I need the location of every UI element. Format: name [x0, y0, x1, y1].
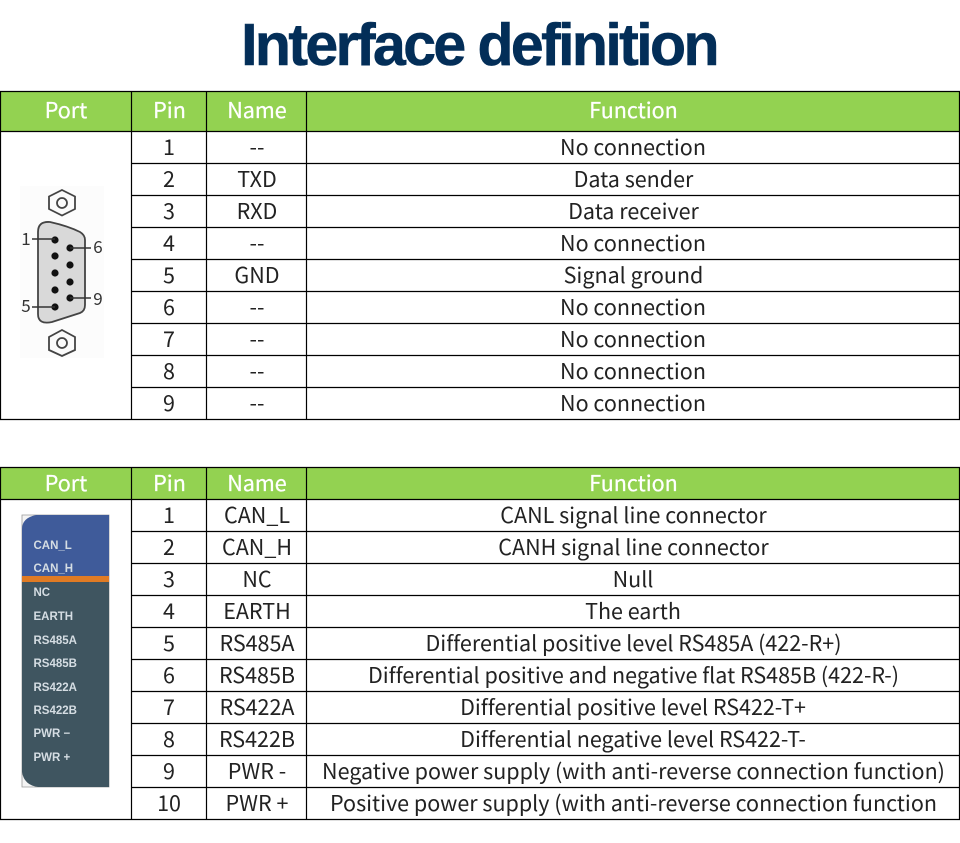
- row: pin 5: 5: [163, 627, 175, 658]
- row: pin 5: GND: [234, 259, 280, 290]
- row: pin 4: --: [250, 227, 264, 258]
- table: terminal port pin definition: [0, 467, 960, 820]
- row: pin 2: CANH signal line connector: [498, 531, 769, 562]
- row: pin 5: Signal ground: [564, 259, 703, 290]
- table: DB9 port pin definition: [0, 92, 960, 420]
- header row: Name: [227, 467, 287, 498]
- row: pin 2: [163, 163, 694, 194]
- row: pin 8: No connection: [560, 355, 706, 386]
- row: pin 3: NC: [242, 563, 272, 594]
- row: pin 5: [163, 627, 842, 658]
- row: pin 3: RXD: [237, 195, 277, 226]
- row: pin 7: RS422A: [219, 691, 295, 722]
- row: pin 6: No connection: [560, 291, 706, 322]
- row: pin 5: RS485A: [219, 627, 295, 658]
- row: pin 8: Differential negative level RS422-T-: [460, 723, 806, 754]
- row: pin 5: 5: [163, 259, 175, 290]
- header row: Function: [589, 94, 678, 125]
- header row: Name: [227, 94, 287, 125]
- header row: [0, 92, 960, 132]
- icon: terminal block label strip: RS422A: [34, 682, 77, 694]
- row: pin 9: No connection: [560, 387, 706, 418]
- icon: DB9 connector diagram: [20, 186, 104, 358]
- row: pin 6: --: [250, 291, 264, 322]
- row: pin 7: No connection: [560, 323, 706, 354]
- row: pin 5: Differential positive level RS485A (422-R+): [425, 627, 842, 658]
- icon: DB9 connector diagram: 9: [93, 285, 103, 310]
- icon: terminal block label strip: RS485B: [34, 658, 77, 670]
- icon: terminal block label strip: NC: [34, 587, 50, 599]
- row: pin 10: Positive power supply (with anti-reverse connection function: [330, 787, 937, 818]
- row: pin 2: Data sender: [574, 163, 694, 194]
- row: pin 9: 9: [163, 387, 175, 418]
- row: pin 3: [163, 195, 700, 226]
- row: pin 1: 1: [163, 131, 175, 162]
- row: pin 4: [163, 227, 706, 258]
- icon: terminal block label strip: RS485A: [34, 635, 77, 647]
- row: pin 4: [163, 595, 681, 626]
- row: pin 2: 2: [163, 531, 175, 562]
- row: pin 2: CAN_H: [222, 531, 292, 562]
- header row: Port: [45, 94, 87, 125]
- row: pin 1: [163, 499, 767, 530]
- row: pin 8: [163, 723, 806, 754]
- icon: DB9 connector diagram: 1: [21, 225, 31, 250]
- row: pin 9: 9: [163, 755, 175, 786]
- row: pin 2: 2: [163, 163, 175, 194]
- row: pin 10: PWR +: [226, 787, 289, 818]
- row: pin 4: No connection: [560, 227, 706, 258]
- icon: terminal block label strip: PWR −: [34, 728, 71, 740]
- icon: terminal block label strip: [22, 515, 109, 787]
- row: pin 3: [163, 563, 653, 594]
- row: pin 8: 8: [163, 723, 175, 754]
- row: pin 9: Negative power supply (with anti-reverse connection function): [322, 755, 945, 786]
- row: pin 4: EARTH: [223, 595, 291, 626]
- row: pin 8: --: [250, 355, 264, 386]
- icon: DB9 connector diagram: 5: [21, 292, 31, 317]
- row: pin 6: RS485B: [219, 659, 295, 690]
- row: pin 5: [163, 259, 703, 290]
- row: pin 1: CAN_L: [224, 499, 290, 530]
- row: pin 1: 1: [163, 499, 175, 530]
- row: pin 3: 3: [163, 195, 175, 226]
- row: pin 6: [163, 291, 706, 322]
- row: pin 3: Null: [613, 563, 653, 594]
- row: pin 7: 7: [163, 691, 175, 722]
- icon: DB9 connector diagram: 6: [93, 233, 103, 258]
- icon: terminal block label strip: PWR +: [34, 752, 71, 764]
- header row: Pin: [153, 467, 186, 498]
- row: pin 4: 4: [163, 227, 175, 258]
- row: pin 1: [163, 131, 706, 162]
- row: pin 1: No connection: [560, 131, 706, 162]
- row: pin 8: RS422B: [219, 723, 295, 754]
- header row: [0, 467, 960, 500]
- header row: Port: [45, 467, 87, 498]
- row: pin 6: 6: [163, 659, 175, 690]
- row: pin 8: [163, 355, 706, 386]
- icon: terminal block label strip: CAN_L: [34, 540, 72, 552]
- header row: Pin: [153, 94, 186, 125]
- row: pin 6: 6: [163, 291, 175, 322]
- icon: terminal block label strip: EARTH: [34, 611, 73, 623]
- icon: terminal block label strip: RS422B: [34, 705, 77, 717]
- header row: Function: [589, 467, 678, 498]
- row: pin 2: TXD: [237, 163, 277, 194]
- row: pin 6: Differential positive and negative flat RS485B (422-R-): [368, 659, 899, 690]
- row: pin 7: 7: [163, 323, 175, 354]
- title: Interface definition: [241, 12, 717, 78]
- row: pin 8: 8: [163, 355, 175, 386]
- row: pin 1: CANL signal line connector: [500, 499, 767, 530]
- row: pin 1: --: [250, 131, 264, 162]
- row: pin 7: Differential positive level RS422-T+: [460, 691, 806, 722]
- row: pin 9: PWR -: [228, 755, 286, 786]
- row: pin 9: --: [250, 387, 264, 418]
- row: pin 4: The earth: [585, 595, 681, 626]
- row: pin 4: 4: [163, 595, 175, 626]
- icon: terminal block label strip: CAN_H: [34, 563, 73, 575]
- row: pin 3: Data receiver: [568, 195, 700, 226]
- row: pin 10: 10: [157, 787, 181, 818]
- row: pin 7: --: [250, 323, 264, 354]
- row: pin 9: [163, 387, 706, 418]
- row: pin 2: [163, 531, 769, 562]
- row: pin 7: [163, 323, 706, 354]
- row: pin 3: 3: [163, 563, 175, 594]
- row: pin 7: [163, 691, 806, 722]
